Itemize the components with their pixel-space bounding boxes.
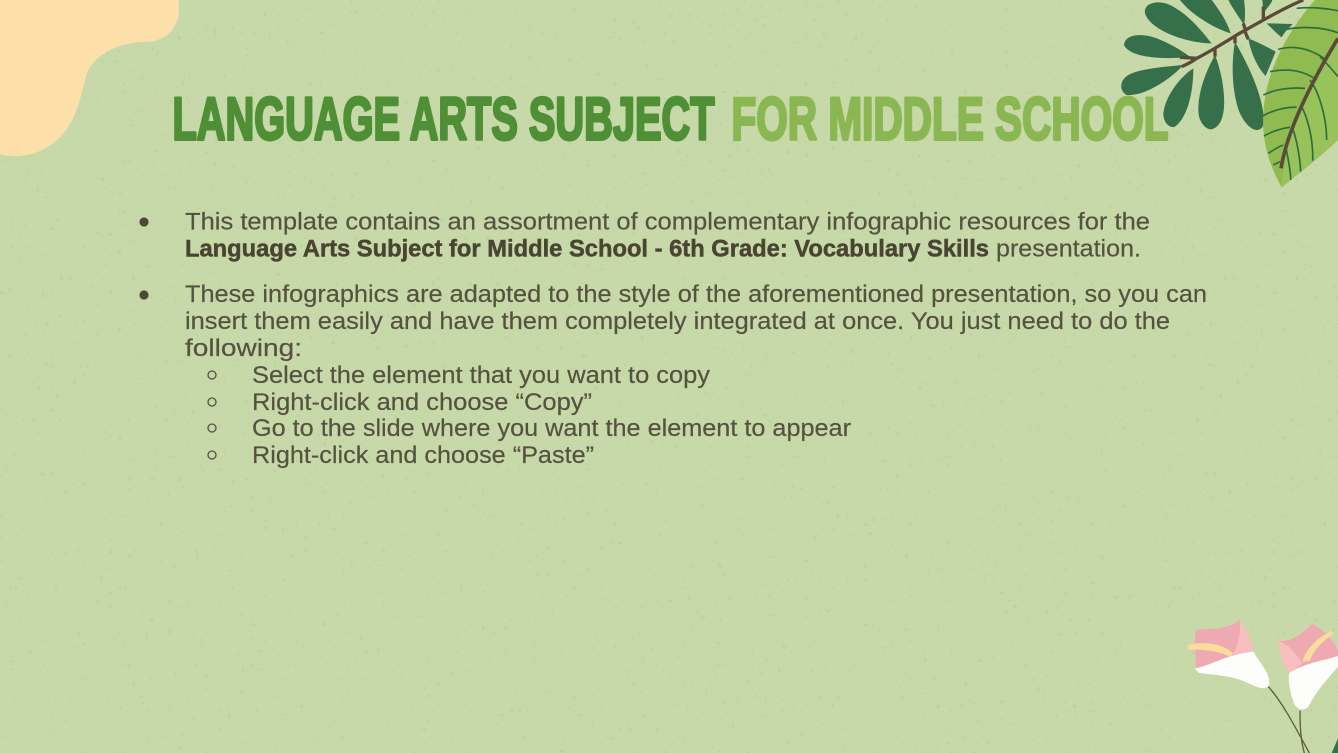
bullet list text bbox=[139, 208, 1207, 469]
sub-list: Select the element that you want to copy bbox=[252, 362, 710, 389]
sub-list bbox=[208, 362, 851, 469]
bullet 2 text bbox=[185, 281, 1207, 362]
decorative peach blob bbox=[0, 0, 179, 156]
leaves illustration bbox=[1121, 0, 1338, 187]
bullet 1 marker bbox=[139, 217, 149, 227]
bullet 2 marker bbox=[139, 290, 149, 300]
bullet 1 text: This template contains an assortment of complementary infographic resources for the bbox=[185, 208, 1150, 236]
bullet 2 text: These infographics are adapted to the style of the aforementioned presentation, so you can bbox=[185, 281, 1207, 308]
bullet 1 text: Language Arts Subject for Middle School - 6th Grade: Vocabulary Skills bbox=[185, 236, 989, 262]
bullet 2 text: following: bbox=[185, 335, 302, 362]
bullet 1 text: presentation. bbox=[996, 236, 1141, 262]
title: LANGUAGE ARTS SUBJECT bbox=[172, 86, 714, 152]
bullet 2 text: insert them easily and have them completely integrated at once. You just need to do the bbox=[185, 308, 1170, 335]
flowers illustration bbox=[1187, 620, 1338, 753]
sub-list: Right-click and choose “Paste” bbox=[252, 442, 594, 469]
sub-list: Right-click and choose “Copy” bbox=[252, 389, 592, 416]
bullet 1 text bbox=[185, 208, 1150, 262]
sub-list: Go to the slide where you want the element to appear bbox=[252, 415, 851, 442]
